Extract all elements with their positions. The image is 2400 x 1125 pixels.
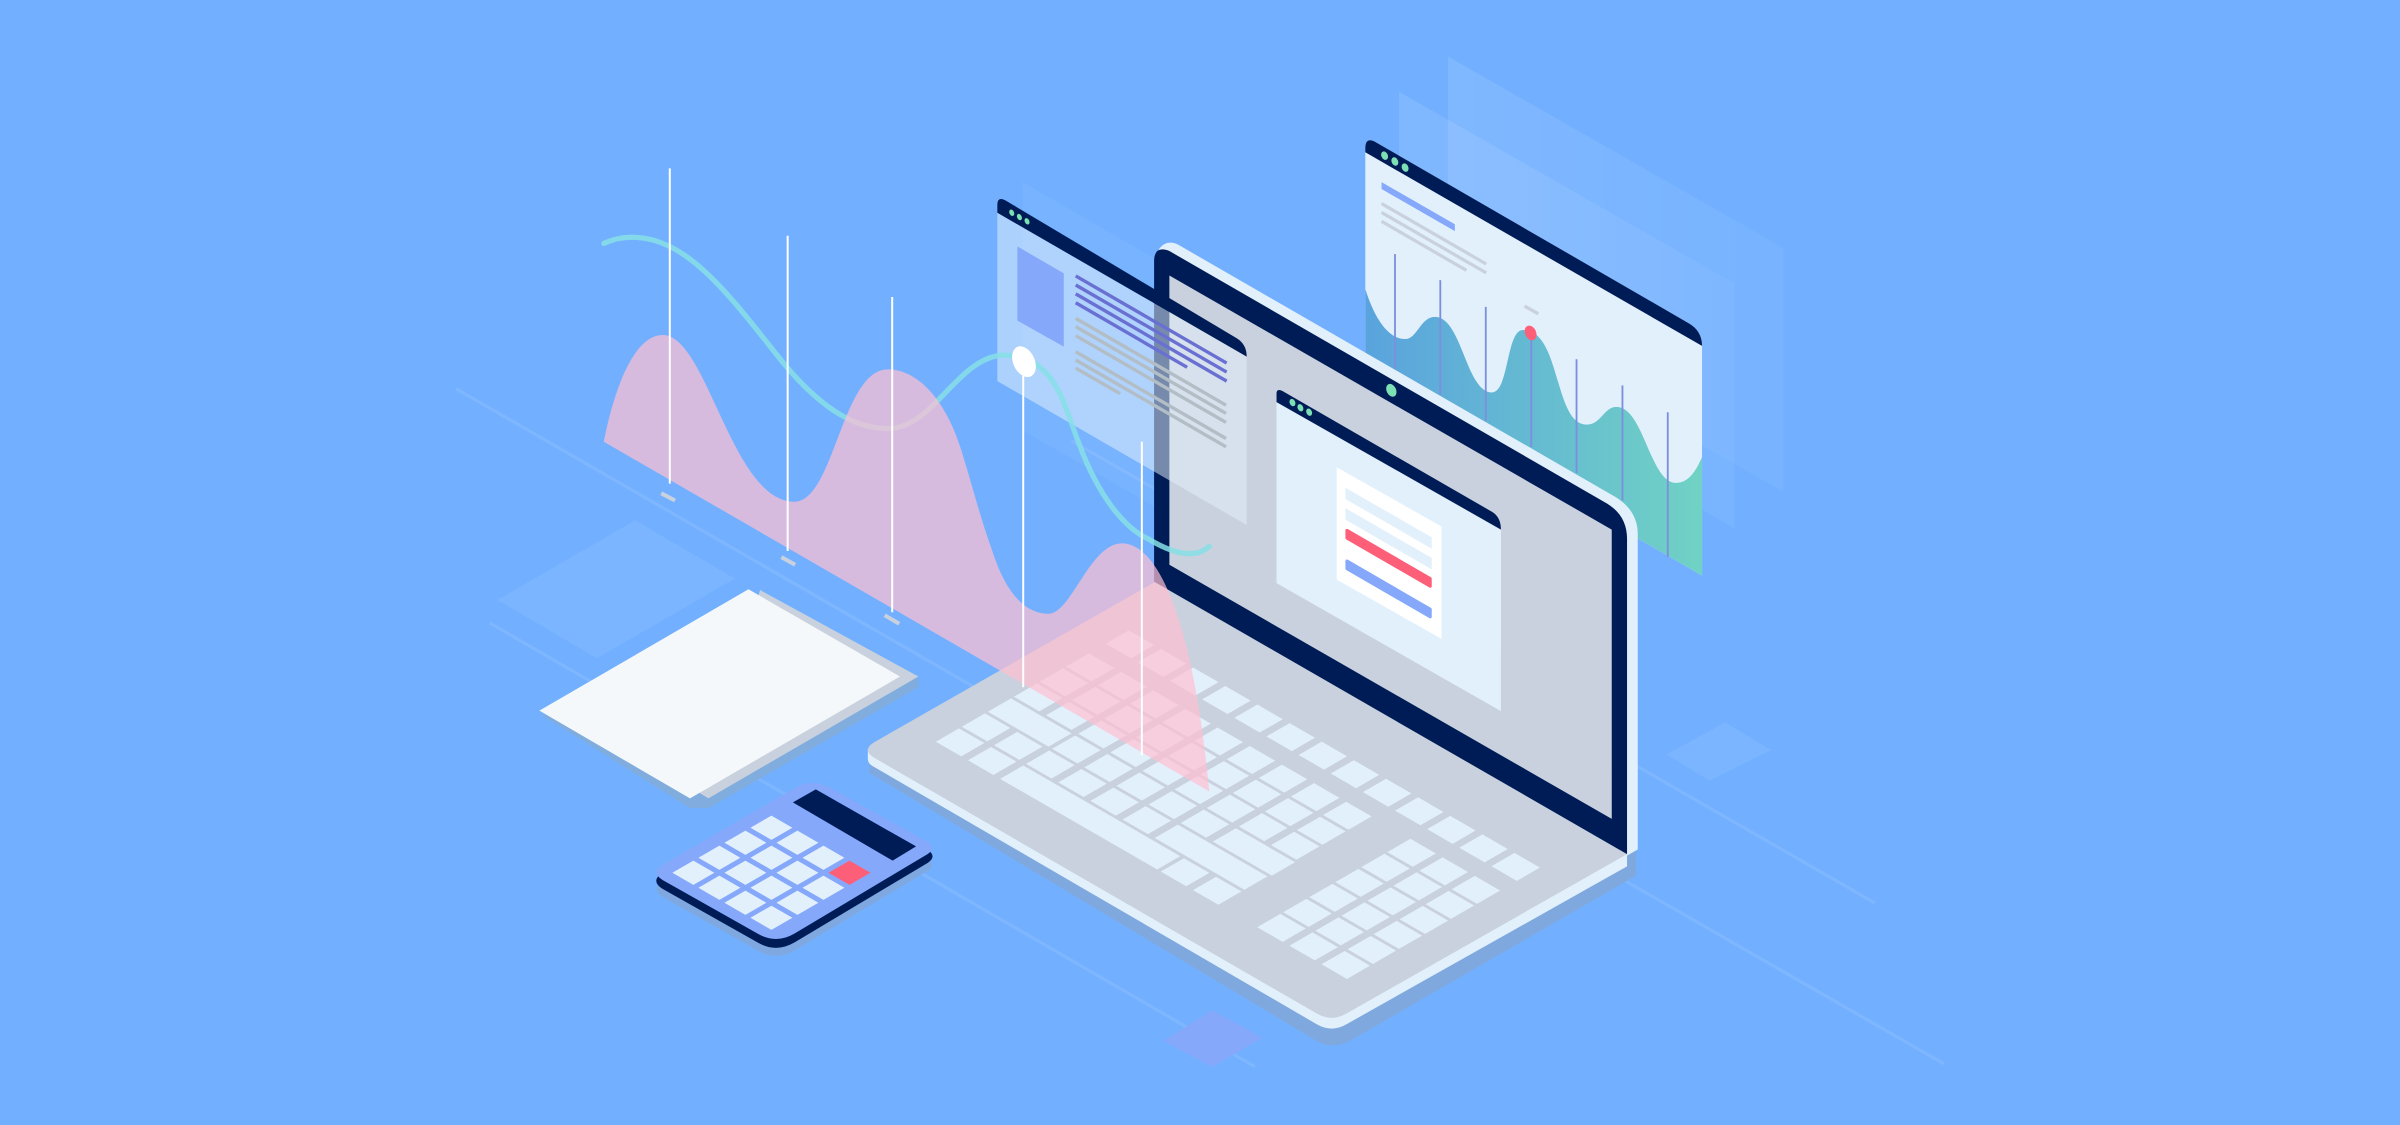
calculator shadow	[657, 800, 932, 956]
form input field one	[1345, 488, 1432, 549]
laptop base top	[868, 582, 1627, 1018]
back sheet	[699, 590, 918, 798]
article image block	[1017, 246, 1064, 347]
laptop bezel	[1154, 249, 1627, 854]
front sheet	[539, 589, 900, 798]
floor tile: periwinkle diamond	[1163, 1010, 1263, 1067]
calculator side	[657, 791, 932, 947]
laptop screen	[1169, 276, 1612, 819]
axis tick marks	[661, 493, 899, 624]
panel: on-screen form window	[1277, 390, 1501, 711]
paper shadow	[539, 677, 918, 808]
laptop base edge	[868, 748, 1627, 1029]
calculator display	[793, 789, 916, 861]
main keyboard keys	[937, 654, 1372, 905]
heading bar	[1382, 182, 1455, 231]
form card	[1337, 467, 1442, 639]
calculator keys	[672, 816, 870, 930]
article window dots	[1008, 209, 1031, 225]
ghost panel: middle right	[1399, 92, 1734, 528]
function key row	[1107, 631, 1539, 880]
text lines	[1382, 204, 1486, 273]
article body lines	[1076, 318, 1226, 447]
chart vertical markers	[1395, 254, 1668, 557]
form window title bar	[1277, 390, 1501, 530]
calculator	[657, 783, 932, 956]
white data point	[1007, 342, 1041, 381]
panel: translucent article window	[997, 199, 1247, 525]
paper stack	[539, 589, 918, 808]
calculator red key	[829, 861, 870, 885]
red data point	[1522, 324, 1539, 342]
form window dots	[1288, 398, 1313, 417]
form window body	[1277, 395, 1501, 711]
floor tile: faint right diamond	[1667, 722, 1771, 781]
teal trend line	[604, 237, 1209, 554]
article window body	[997, 213, 1247, 525]
numeric keypad	[1258, 839, 1499, 978]
panel: area chart window	[1365, 140, 1702, 576]
article heading lines	[1076, 276, 1227, 381]
white chart markers	[670, 168, 1142, 755]
window body	[1365, 140, 1702, 576]
area chart wave	[1365, 289, 1702, 576]
calculator top face	[657, 783, 932, 939]
article window title bar	[997, 199, 1247, 357]
webcam	[1384, 382, 1398, 398]
window dots	[1380, 150, 1410, 173]
ghost panel: back right	[1448, 57, 1783, 491]
title bar	[1365, 140, 1702, 346]
small value tick	[1524, 306, 1538, 314]
laptop shadow	[869, 762, 1636, 1045]
laptop lid edge	[1159, 243, 1638, 856]
form red button	[1347, 530, 1430, 586]
form input field two	[1345, 508, 1432, 569]
laptop	[868, 243, 1638, 1045]
pink area chart	[604, 335, 1209, 791]
ghost panel: behind left window	[1022, 182, 1179, 520]
floor tile: faint left diamond	[497, 520, 735, 658]
form blue button	[1347, 561, 1430, 617]
